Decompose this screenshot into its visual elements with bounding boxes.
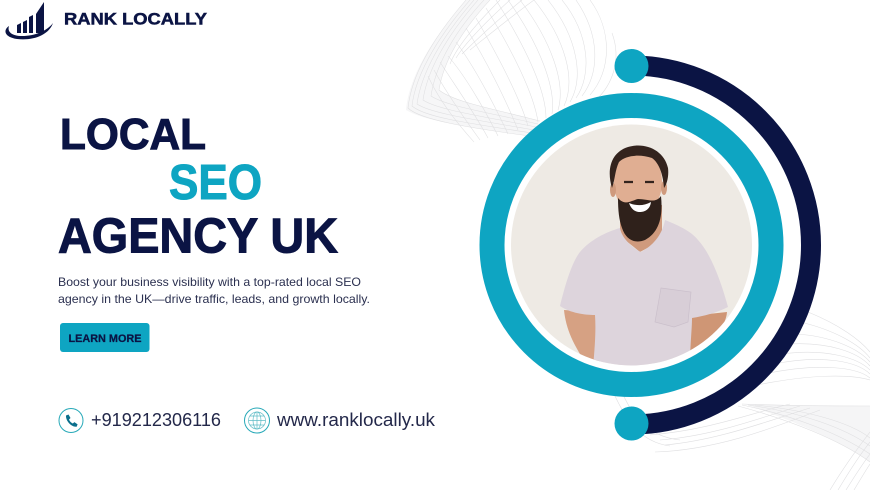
description text: agency in the UK—drive traffic, leads, and growth locally. [58, 292, 370, 306]
bottom teal dot [614, 406, 648, 440]
decorative wave: bottom right [610, 312, 870, 490]
headline: LOCAL [60, 110, 206, 159]
icon: rising bars logo [5, 2, 53, 39]
smile [629, 202, 651, 212]
headline: SEO [169, 156, 262, 210]
icon: globe [244, 408, 270, 433]
eyes and brows [624, 181, 654, 183]
learn more button: LEARN MORE [68, 333, 142, 345]
top teal dot [614, 49, 648, 83]
photo: smiling bearded man [510, 124, 754, 368]
hair [610, 146, 668, 188]
arms [564, 310, 600, 362]
navy arc [632, 66, 811, 424]
shirt [560, 220, 728, 368]
beard [618, 196, 662, 242]
website contact [244, 408, 436, 433]
learn more button [60, 323, 150, 352]
phone contact [59, 408, 221, 432]
headline [58, 110, 338, 264]
website contact: www.ranklocally.uk [276, 410, 436, 430]
headline: AGENCY UK [58, 210, 338, 264]
icon: phone [59, 408, 83, 432]
face [614, 156, 662, 202]
shirt pocket [655, 288, 691, 327]
phone contact: +919212306116 [91, 410, 221, 430]
description text [58, 275, 370, 306]
description text: Boost your business visibility with a top-rated local SEO [58, 275, 361, 289]
decorative wave: top [406, 0, 616, 142]
brand name: RANK LOCALLY [64, 10, 207, 28]
teal ring [492, 106, 771, 384]
logo [5, 2, 207, 39]
neck [620, 205, 662, 252]
